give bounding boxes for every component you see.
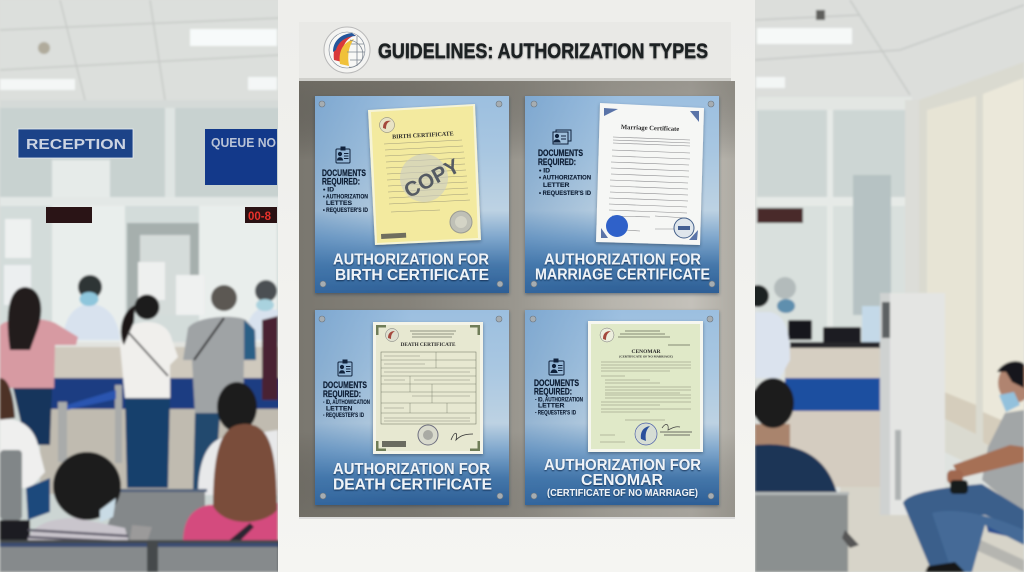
icon: ID badge [336,147,350,163]
documents required list: DOCUMENTS [322,168,366,178]
sign: queue number: QUEUE NO [211,136,276,150]
panel heading [333,252,489,284]
panel heading [333,461,492,494]
wall column [278,0,755,572]
certificate: cenomar [588,321,703,452]
sign: reception: RECEPTION [26,137,126,153]
screws [319,101,503,287]
documents required list: DOCUMENTS [323,380,367,390]
certificate: cenomar: CENOMAR [631,349,662,355]
documents required list [322,168,368,214]
screws [530,316,714,499]
panel heading: AUTHORIZATION FOR [333,252,489,268]
certificate: birth [368,104,481,245]
documents required list: - REQUESTER'S ID [535,410,576,416]
documents required list: - ID, AUTHORIZATION [535,396,583,404]
documents required list: • AUTHORIZATION [539,174,591,182]
documents required list: LETTES [326,200,353,207]
panel heading: BIRTH CERTIFICATE [335,267,489,284]
documents required list: REQUIRED: [534,386,572,396]
certificate: marriage: Marriage Certificate [621,124,679,133]
documents required list: • REQUESTER'S ID [323,207,368,214]
panel heading: AUTHORIZATION FOR [333,461,490,478]
sign: queue number [205,129,277,185]
documents required list: • AUTHORIZATION [323,194,368,200]
documents required list: DOCUMENTS [534,378,579,388]
metal backing board [299,81,735,519]
screws [319,316,503,499]
panel heading: AUTHORIZATION FOR [544,457,701,474]
panel: birth certificate [315,96,509,293]
documents required list: LETTEN [326,406,353,412]
certificate: death [373,322,483,454]
documents required list: REQUIRED: [538,157,576,167]
documents required list: - REQUESTER'S ID [323,412,364,419]
panel heading [535,252,710,284]
title: GUIDELINES: AUTHORIZATION TYPES [378,40,708,63]
icon: ID badge [549,359,564,375]
certificate: cenomar: (CERTIFICATE OF NO MARRIAGE) [619,354,673,358]
documents required list: DOCUMENTS [538,148,583,158]
documents required list: LETTER [543,182,570,189]
documents required list [538,148,591,197]
documents required list [323,380,370,419]
panel: cenomar [525,310,719,505]
icon: ID badge [338,360,352,376]
panel heading: (CERTIFICATE OF NO MARRIAGE) [547,487,698,499]
documents required list: REQUIRED: [322,176,360,186]
display: red queue counter [245,207,277,223]
header plaque [299,22,731,81]
icon: ID cards [553,130,571,144]
panel heading [544,457,701,499]
documents required list [534,378,583,416]
documents required list: LETTER [538,402,565,410]
panel heading: MARRIAGE CERTIFICATE [535,266,710,284]
documents required list: - ID, AUTHOWICATION [323,399,370,406]
screws [531,101,715,287]
logo: agency seal [324,27,370,73]
panel: death certificate [315,310,509,505]
panel heading: CENOMAR [581,472,663,489]
documents required list: • REQUESTER'S ID [539,190,591,197]
panel heading: DEATH CERTIFICATE [333,476,492,494]
panel heading: AUTHORIZATION FOR [544,252,701,268]
documents required list: • ID [539,168,550,174]
display: dark counter board [46,207,92,223]
certificate: marriage [596,103,704,245]
certificate: death: DEATH CERTIFICATE [401,342,456,348]
certificate: birth: BIRTH CERTIFICATE [392,131,454,141]
documents required list: • ID [323,186,334,194]
display: red queue counter: 00-8 [248,211,272,223]
background: right waiting area [747,0,1024,572]
sign: reception [18,129,133,158]
certificate: birth: COPY [400,155,464,203]
documents required list: REQUIRED: [323,389,361,399]
panel: marriage certificate [525,96,719,293]
background: left office reception [0,0,280,572]
